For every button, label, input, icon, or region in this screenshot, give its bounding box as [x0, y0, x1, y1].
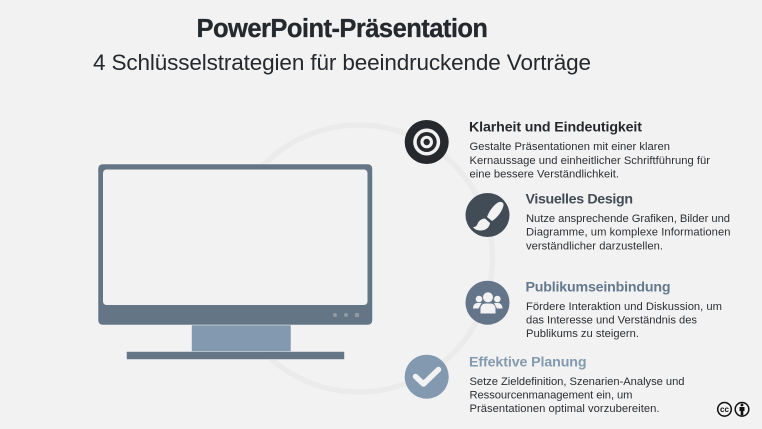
text block: Klarheit und Eindeutigkeit: Klarheit und Eindeutigkeit: [469, 120, 642, 136]
text block: Visuelles Design: Diagramme, um komplexe Informationen: [526, 226, 730, 238]
subtitle: 4 Schlüsselstrategien für beeindruckende Vorträge: [93, 50, 591, 75]
icon: paint brush: [466, 193, 510, 237]
text block: Klarheit und Eindeutigkeit: eine bessere Verständlichkeit.: [470, 168, 619, 180]
text block: Effektive Planung: [469, 354, 684, 415]
text block: Visuelles Design: verständlicher darzustellen.: [526, 240, 663, 252]
monitor illustration: [98, 164, 372, 360]
text block: Publikumseinbindung: das Interesse und Verständnis des: [526, 314, 697, 326]
icon: audience group: [466, 281, 510, 325]
text block: Effektive Planung: Setze Zieldefinition, Szenarien-Analyse und: [470, 376, 684, 388]
title: PowerPoint-Präsentation: [196, 15, 488, 43]
icon: creative commons CC: cc: [720, 405, 729, 414]
text block: Effektive Planung: Präsentationen optimal vorzubereiten.: [470, 403, 660, 415]
text block: Effektive Planung: Ressourcenmanagement ein, um: [470, 389, 632, 401]
icon: creative commons CC: [718, 402, 731, 416]
text block: Effektive Planung: Effektive Planung: [469, 354, 586, 370]
text block: Publikumseinbindung: [526, 280, 722, 340]
text block: Publikumseinbindung: Publikumseinbindung: [526, 280, 670, 296]
text block: Publikumseinbindung: Publikums zu steigern.: [526, 328, 639, 340]
text block: Visuelles Design: Visuelles Design: [526, 192, 633, 208]
text block: Visuelles Design: Nutze ansprechende Grafiken, Bilder und: [526, 213, 730, 225]
text block: Klarheit und Eindeutigkeit: Kernaussage und einheitlicher Schriftführung für: [470, 155, 710, 167]
text block: Publikumseinbindung: Fördere Interaktion und Diskussion, um: [526, 301, 722, 313]
text block: Klarheit und Eindeutigkeit: Gestalte Präsentationen mit einer klaren: [470, 141, 670, 153]
icon: creative commons attribution: [735, 402, 749, 416]
text block: Visuelles Design: [526, 192, 730, 252]
icon: check mark: [405, 355, 449, 399]
icon: target: [405, 120, 449, 164]
decorative ring: [226, 125, 492, 392]
text block: Klarheit und Eindeutigkeit: [469, 120, 710, 180]
